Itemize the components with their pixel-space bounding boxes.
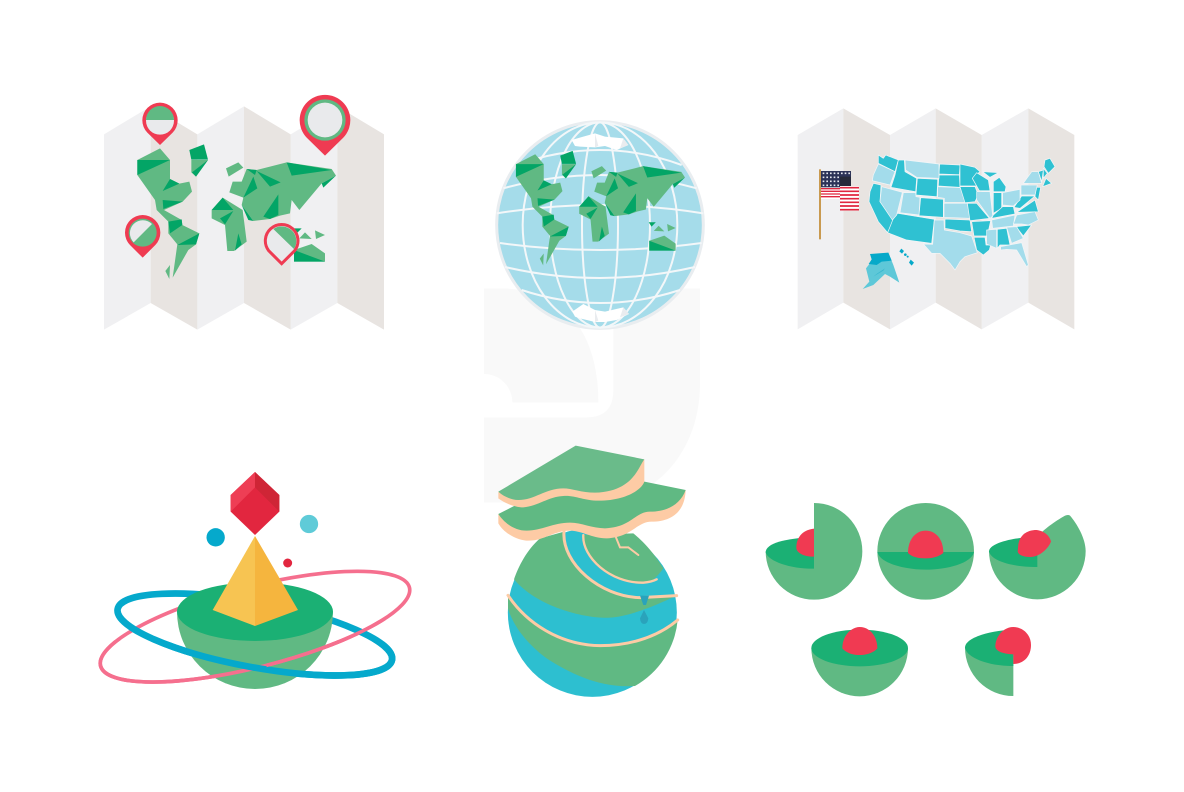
map pin: top left <box>142 103 178 145</box>
Alaska <box>863 253 899 289</box>
panel: folded USA map <box>798 108 1074 329</box>
lower terrain layer <box>498 473 686 541</box>
pyramid <box>213 536 298 626</box>
orbits front <box>98 620 396 684</box>
globe sphere <box>497 122 703 328</box>
folded map sheet <box>798 108 1074 329</box>
globe beige lines <box>508 532 678 646</box>
water drip <box>640 596 649 624</box>
east dark states <box>960 158 1055 255</box>
sphere four <box>811 627 908 696</box>
upper terrain layer <box>498 446 644 507</box>
globe continents <box>516 151 685 265</box>
panel: cut-away earth core spheres <box>766 503 1086 696</box>
striped globe <box>508 528 678 697</box>
infographic canvas <box>98 94 1086 697</box>
red gem <box>231 472 279 535</box>
cloud: bottom <box>572 304 629 322</box>
floating dots <box>206 515 318 567</box>
folded map sheet <box>104 106 384 330</box>
panel: globe with lifted terrain layers <box>498 446 686 697</box>
sphere five <box>965 627 1031 696</box>
map pin: lower right outline <box>265 224 298 264</box>
cloud: top <box>572 133 628 150</box>
sphere two <box>877 503 974 600</box>
globe grid lines <box>497 122 703 328</box>
map pin: top right large <box>300 95 350 156</box>
Hawaii <box>899 249 914 266</box>
panel: globe <box>497 122 703 328</box>
blue orbit back <box>112 577 398 692</box>
world continents <box>137 144 336 279</box>
planet disc <box>177 582 333 641</box>
west dark states <box>869 155 972 243</box>
watermark background shape <box>484 288 700 503</box>
panel: planet with pyramid and orbits <box>98 472 412 689</box>
map pin: left <box>125 215 160 258</box>
east light states <box>977 172 1042 267</box>
panel: folded world map with pins <box>104 95 384 330</box>
US flag <box>819 169 859 239</box>
west light states <box>872 160 977 270</box>
USA states map <box>869 155 1055 270</box>
sphere three <box>989 515 1086 599</box>
pink orbit back <box>91 548 419 705</box>
sphere one <box>766 503 862 600</box>
planet bowl <box>177 612 333 689</box>
